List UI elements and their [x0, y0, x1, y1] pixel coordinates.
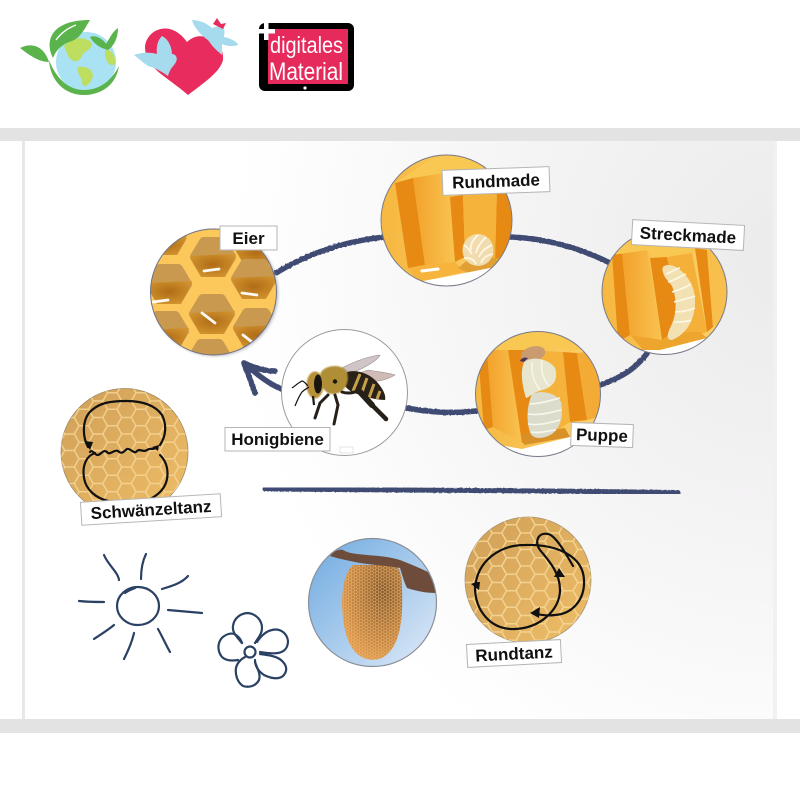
icon: sun — [79, 554, 202, 659]
circle: Schwänzeltanz — [60, 388, 188, 502]
waggle dance path — [83, 401, 168, 501]
label: Eier: Eier — [232, 229, 265, 248]
logo: earth with leaves — [20, 20, 119, 95]
icon: honey bee — [292, 355, 395, 424]
icon: hive — [342, 565, 402, 660]
divider line — [265, 489, 678, 492]
circle: Rundtanz — [460, 515, 595, 645]
whiteboard panel — [0, 128, 800, 733]
label: Puppe: Puppe — [576, 425, 628, 446]
icon: round larva — [462, 234, 494, 266]
label: Rundmade: Rundmade — [452, 170, 540, 193]
label: Rundmade — [442, 167, 550, 195]
circle: Streckmade — [602, 238, 728, 355]
circle: Eier — [150, 228, 280, 358]
icon: pupa — [519, 344, 562, 438]
circle: Rundmade — [378, 152, 516, 292]
icon: flower — [218, 613, 288, 687]
label: Honigbiene: Honigbiene — [231, 430, 324, 449]
logo: heart with butterfly and bee — [134, 18, 238, 95]
watermark tag — [340, 447, 353, 453]
branch — [330, 550, 436, 593]
label: Streckmade: Streckmade — [639, 223, 737, 248]
label: Puppe — [571, 422, 633, 448]
cycle arrows — [244, 237, 648, 412]
circle: bee colony — [305, 535, 440, 670]
label: Rundtanz: Rundtanz — [475, 642, 553, 666]
label: Rundtanz — [466, 640, 562, 667]
label: Schwänzeltanz: Schwänzeltanz — [90, 497, 212, 523]
label: Streckmade — [631, 220, 745, 250]
icon: stretched larva — [662, 265, 695, 340]
label: Eier — [220, 226, 277, 250]
circle: Honigbiene — [282, 330, 408, 456]
logo: digitales Material tablet — [257, 23, 354, 91]
logo: digitales Material tablet: Material — [269, 58, 343, 86]
logo: digitales Material tablet: digitales — [270, 32, 343, 58]
round dance path — [475, 534, 584, 629]
circle: Puppe — [475, 331, 601, 457]
